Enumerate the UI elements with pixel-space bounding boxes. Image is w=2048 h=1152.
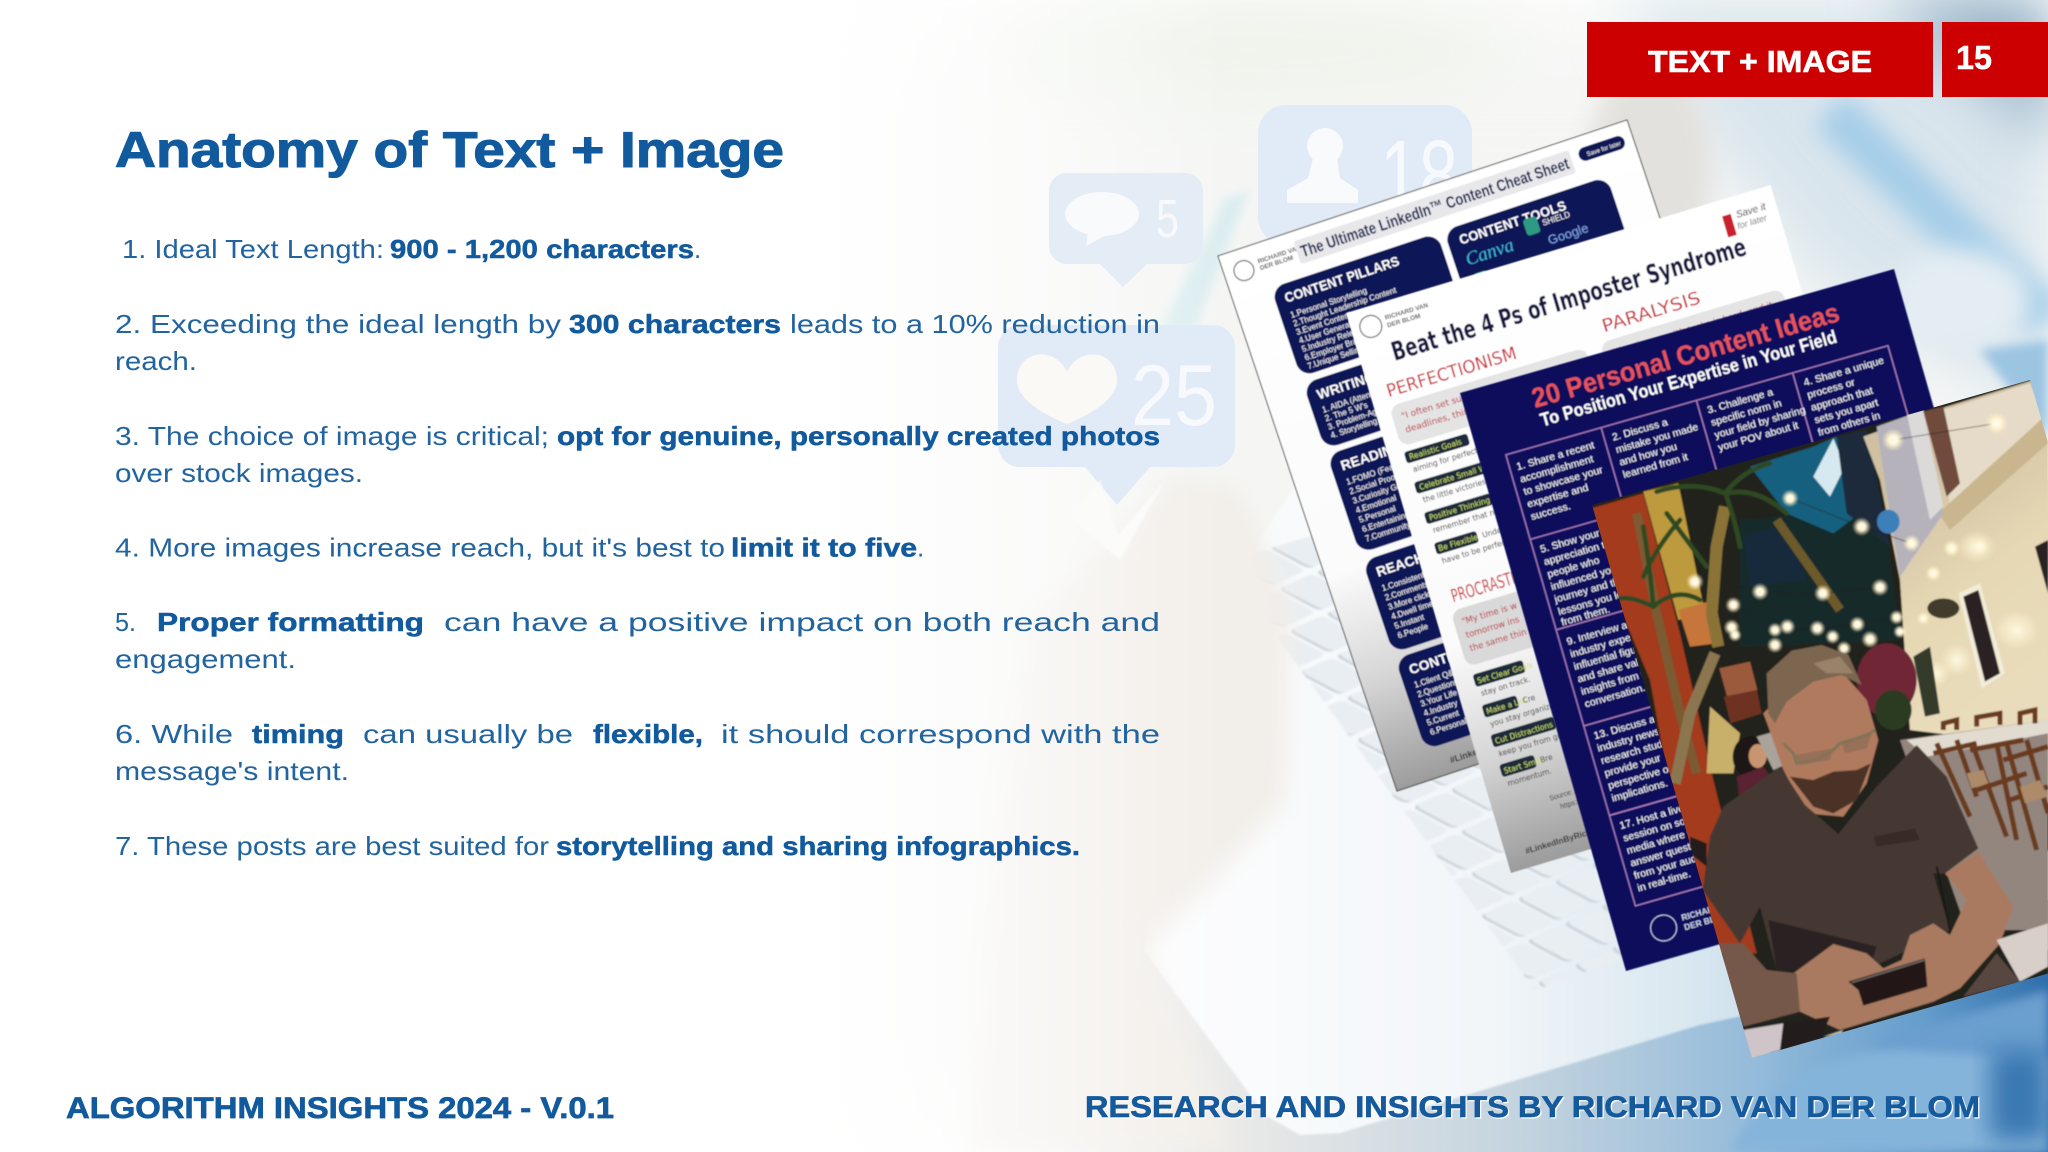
panel: content ideas: 6.Personal: [1429, 717, 1468, 737]
keyboard keys: [1230, 480, 1700, 990]
idea cells: people who: [1546, 554, 1601, 581]
tip chips: perfectionism: have to be perfect: [1441, 537, 1510, 566]
panel: content pillars: 7.Unique Selling: [1306, 344, 1365, 371]
tip chips: procrastination: you stay organized: [1489, 699, 1560, 729]
table and trousers: [1743, 1023, 1783, 1058]
panel: reach: 4.Dwell time: [1390, 599, 1435, 622]
woman in background: [1732, 732, 1783, 796]
tip chips: procrastination: Start Small: [1503, 755, 1545, 776]
list item 2: [115, 309, 1160, 376]
sheet: Beat the 4 Ps of Imposter Syndrome: the same thin: [1469, 628, 1528, 654]
title: Anatomy of Text + Image: [115, 122, 784, 178]
sheet: Beat the 4 Ps of Imposter Syndrome: "I often set super high standards and: [1400, 364, 1563, 422]
icon: heart bubble with count 25: 25: [1131, 348, 1217, 444]
list item 3: over stock images.: [115, 458, 363, 488]
panel: content pillars: CONTENT PILLARS: [1282, 253, 1401, 306]
tip chips: procrastination: momentum.: [1506, 766, 1553, 788]
panel: content tools: Canva: [1463, 235, 1517, 270]
panel: reading: 4.Emotional: [1355, 493, 1398, 515]
panel: content ideas: 2.Questions: [1416, 677, 1460, 699]
sheet: Beat the 4 Ps of Imposter Syndrome: Beat the 4 Ps of Imposter Syndrome: [1388, 232, 1750, 368]
sheet: Beat the 4 Ps of Imposter Syndrome: "Keeping up with tasks is hard, and it: [1611, 300, 1775, 359]
list item 2: 300 characters: [569, 309, 781, 339]
sheet: Beat the 4 Ps of Imposter Syndrome: Source: Jo: [1549, 786, 1583, 803]
footer left: ALGORITHM INSIGHTS 2024 - V.0.1: [66, 1092, 614, 1125]
sheet: Ultimate LinkedIn Content Cheat Sheet: #LinkedInByRichard: [1449, 729, 1534, 765]
logo: Richard van der Blom: RICHARD VAN: [1680, 897, 1739, 922]
floor, tables and chairs: [1900, 710, 2048, 930]
panel: reach: 3.More clicks: [1387, 589, 1434, 612]
panel: content tools: Google: [1546, 220, 1590, 248]
sheet: Beat the 4 Ps of Imposter Syndrome: deadlines, thinking: [1404, 401, 1489, 436]
panel: content pillars: [1271, 233, 1467, 377]
idea cells: from your audience: [1632, 846, 1722, 882]
list item 2: reach.: [115, 346, 197, 376]
panel: reading: READING: [1338, 438, 1405, 474]
idea grid lines: [1506, 346, 2017, 906]
tip chips: perfectionism: aiming for perfect: [1412, 446, 1479, 474]
idea cells: 2. Discuss a: [1611, 416, 1669, 444]
tip chips: procrastination: [1472, 653, 1577, 789]
idea cells: from others in: [1817, 410, 1882, 439]
idea cells: and how you: [1618, 441, 1679, 469]
idea cells: media where you: [1625, 823, 1706, 857]
panel: reading: 5.Personal: [1358, 504, 1397, 525]
blurred hand: [970, 470, 1290, 1152]
panel: writing: [1303, 329, 1491, 449]
list item 6: [115, 719, 1160, 786]
list item 6: flexible,: [593, 719, 703, 749]
idea cells: lessons you learned: [1557, 581, 1650, 618]
list item 3: 3. The choice of image is critical;: [115, 421, 549, 451]
sheet: Ultimate LinkedIn Content Cheat Sheet: [1218, 120, 1806, 791]
idea cells: success.: [1529, 500, 1572, 523]
list item 6: it should correspond with the: [721, 719, 1160, 749]
list item 4: .: [917, 532, 924, 562]
list item 5: 5.: [115, 607, 136, 637]
tip chips: procrastination: Make a List: [1485, 695, 1528, 716]
idea cells: 17. Host a live Q&A: [1618, 795, 1710, 832]
panel: content ideas: 3.Your Life: [1419, 688, 1459, 709]
idea cells: influential figure: [1573, 641, 1647, 673]
list item 6: can usually be: [363, 719, 573, 749]
idea cells: answer questions: [1629, 835, 1711, 869]
idea cells: sets you apart: [1813, 397, 1880, 426]
sheet: Ultimate LinkedIn Content Cheat Sheet: RICHARD VAN: [1257, 245, 1302, 266]
idea cells: and share valuable: [1576, 650, 1665, 686]
tip chips: procrastination: Cre: [1522, 693, 1537, 705]
idea cells: mistake you made: [1614, 421, 1700, 456]
panel: content pillars: 5.Industry Relevant: [1301, 324, 1370, 354]
idea cells: research study,: [1600, 736, 1671, 767]
panel: content tools: [1444, 176, 1637, 320]
panel: content ideas: [1395, 604, 1592, 750]
list item 7: storytelling and sharing infographics.: [556, 831, 1080, 861]
list item 4: [115, 532, 924, 562]
idea cells: specific norm in: [1710, 397, 1783, 429]
tip chips: procrastination: stay on track.: [1480, 674, 1532, 698]
idea cells: expertise and: [1526, 482, 1590, 511]
photo: man using phone in a lit courtyard restaurant: [1580, 373, 2048, 1058]
panel: reading: 3.Curiosity Gap: [1351, 480, 1407, 506]
sheet: Beat the 4 Ps of Imposter Syndrome: https://: [1559, 798, 1582, 811]
panel: writing: 1. AIDA (Attention): [1321, 385, 1387, 415]
sheet: 20 Personal Content Ideas: [1460, 269, 2048, 971]
sheet: Beat the 4 Ps of Imposter Syndrome: [1346, 185, 1936, 873]
idea cells: in real-time.: [1636, 868, 1692, 894]
icon: chat bubble with count 5: 5: [1156, 189, 1179, 249]
sheet: Ultimate LinkedIn Content Cheat Sheet: The Ultimate LinkedIn™ Content Cheat Sheet: [1298, 154, 1572, 261]
idea cells: your field by sharing: [1713, 404, 1807, 441]
wall and trees at left: [1643, 483, 1705, 620]
panel: content pillars: 6.Employer Branding: [1304, 330, 1377, 363]
panel: content pillars: 4.User Generated: [1298, 317, 1361, 346]
sheet: Beat the 4 Ps of Imposter Syndrome: DER BLOM: [1386, 313, 1422, 329]
icon: heart bubble with count 25: [998, 325, 1235, 505]
sheet: Beat the 4 Ps of Imposter Syndrome: for later: [1736, 212, 1769, 231]
idea cells: implications.: [1610, 777, 1669, 805]
idea cells: 1. Share a recent: [1515, 439, 1596, 473]
idea cells: 5. Show your: [1539, 527, 1602, 556]
panel: content pillars: 3.Event Content: [1295, 310, 1353, 337]
panel: reading: 2.Social Proof: [1348, 472, 1399, 496]
panel: content tools: SHIELD: [1541, 210, 1572, 228]
tip chips: perfectionism: Positive Thinking: [1428, 495, 1491, 522]
list item 7: 7. These posts are best suited for: [115, 831, 549, 861]
panel: content ideas: 5.Current: [1426, 709, 1461, 728]
sheet: Ultimate LinkedIn Content Cheat Sheet: Save for later: [1586, 141, 1622, 158]
icon: person bubble with count 18: 18: [1380, 120, 1458, 232]
list item 5: can have a positive impact on both reach and: [444, 607, 1160, 637]
tip chips: procrastination: Set Clear Goals: [1476, 660, 1534, 685]
idea cells: influenced your: [1550, 562, 1622, 593]
page number: [1942, 22, 2048, 97]
tip chips: perfectionism: Be Flexible: [1437, 533, 1479, 553]
panel: reach: 6.People: [1397, 622, 1430, 641]
sheet: 20 Personal Content Ideas: 20 Personal Content Ideas: [1528, 297, 1843, 414]
idea cells: appreciation to: [1542, 538, 1612, 568]
list item 2: 2. Exceeding the ideal length by: [115, 309, 561, 339]
list item 3: opt for genuine, personally created photos: [557, 421, 1160, 451]
panel: reach: REACH: [1374, 549, 1426, 580]
sheet: Beat the 4 Ps of Imposter Syndrome: Save it: [1735, 201, 1768, 221]
icon: chat bubble with count 5: [1049, 173, 1203, 287]
tip chips: perfectionism: Celebrate Small Wins: [1418, 460, 1497, 492]
sheet: Beat the 4 Ps of Imposter Syndrome: PARALYSIS: [1599, 288, 1703, 337]
list item 1: 1. Ideal Text Length:: [122, 234, 384, 264]
idea cells: learned from it: [1622, 451, 1689, 481]
panel: writing: 3. Problem-Agitate: [1327, 402, 1393, 432]
list item 3: [115, 421, 1160, 488]
sheet: Ultimate LinkedIn Content Cheat Sheet: DER BLOM: [1259, 255, 1294, 272]
sheet: 20 Personal Content Ideas: To Position Your Expertise in Your Field: [1538, 327, 1839, 430]
panel: content tools: ChatGPT: [1491, 261, 1526, 280]
list item 7: [115, 831, 1080, 861]
idea cells: [1514, 355, 2007, 895]
windows: [1958, 583, 2005, 688]
page number: 15: [1956, 39, 1992, 76]
flowers: [1857, 643, 1917, 717]
tip chips: procrastination: Cut Distractions: [1494, 720, 1554, 746]
list item 1: .: [694, 234, 701, 264]
fan decoration: [1927, 598, 1959, 618]
list item 1: [122, 234, 701, 264]
list item 6: 6. While: [115, 719, 233, 749]
idea cells: 4. Share a unique: [1802, 355, 1885, 389]
panel: writing: WRITING: [1315, 368, 1377, 402]
idea cells: accomplishment: [1519, 453, 1595, 486]
panel: reading: [1327, 400, 1526, 554]
footer right: RESEARCH AND INSIGHTS BY RICHARD VAN DER BLOM: [1085, 1091, 1980, 1124]
tip chips: procrastination: Bre: [1539, 752, 1554, 765]
idea cells: 3. Challenge a: [1706, 386, 1775, 416]
idea cells: 13. Discuss a recent: [1592, 705, 1687, 742]
list item 1: 900 - 1,200 characters: [390, 234, 694, 264]
panel: content pillars: 2.Thought Leadership Content: [1292, 286, 1398, 328]
tag: TEXT + IMAGE: TEXT + IMAGE: [1648, 44, 1872, 79]
building wall: [1863, 380, 2048, 747]
sheet: Beat the 4 Ps of Imposter Syndrome: PERFECTIONISM: [1384, 343, 1519, 402]
idea cells: process or: [1806, 376, 1857, 401]
sheet: Beat the 4 Ps of Imposter Syndrome: RICHARD VAN: [1384, 302, 1429, 322]
man: phone: [1848, 958, 1927, 1006]
list item 5: engagement.: [115, 644, 296, 674]
list item 6: timing: [252, 719, 344, 749]
idea cells: perspective on: [1607, 762, 1676, 792]
panel: reading: 7.Community: [1364, 520, 1412, 544]
idea cells: provide your: [1603, 752, 1663, 780]
panel: content ideas: 1.Client Q&A: [1413, 667, 1460, 690]
list item 5: [115, 607, 1160, 674]
panel: content ideas: 4.Industry: [1423, 699, 1459, 718]
idea cells: to showcase your: [1522, 464, 1605, 498]
tip chips: perfectionism: Under: [1481, 524, 1506, 540]
man: arms and hands: [1793, 852, 2013, 1030]
idea cells: approach that: [1809, 385, 1875, 414]
idea cells: insights from the: [1580, 665, 1657, 698]
tip chips: perfectionism: remember that not: [1432, 506, 1503, 535]
string lights: [1686, 412, 2008, 656]
logo: Richard van der Blom: [1648, 894, 1743, 944]
sheet: Beat the 4 Ps of Imposter Syndrome: tomorrow ins: [1465, 615, 1521, 641]
laptop body: [1145, 480, 2048, 1135]
idea cells: your field.: [1820, 427, 1867, 451]
panel: reading: 1.FOMO (Fear): [1345, 461, 1400, 487]
sheet: Beat the 4 Ps of Imposter Syndrome: #LinkedInByRichard: [1524, 822, 1605, 856]
list item 4: limit it to five: [731, 532, 917, 562]
panel: reach: 2.Comments: [1384, 580, 1430, 603]
idea cells: journey and the: [1552, 574, 1626, 606]
panel: reading: 6.Entertaining: [1361, 510, 1411, 534]
idea cells: 9. Interview an: [1565, 618, 1634, 648]
tip chips: procrastination: keep you from go: [1498, 731, 1563, 758]
sheet: Beat the 4 Ps of Imposter Syndrome: "My time is w: [1461, 601, 1518, 627]
idea cells: conversation.: [1583, 682, 1647, 711]
idea cells: industry news or: [1596, 722, 1673, 755]
panel: writing: 4. Storytelling: [1330, 417, 1378, 440]
panel: reach: 1.Consistent: [1381, 570, 1426, 593]
idea cells: industry expert,: [1569, 629, 1641, 661]
phone screen glimpse: [1160, 190, 1250, 330]
logo: Richard van der Blom: DER BLOM: [1683, 910, 1729, 932]
idea cells: from them.: [1560, 604, 1611, 629]
list item 5: Proper formatting: [157, 607, 424, 637]
list item 2: leads to a 10% reduction in: [790, 309, 1160, 339]
panel: content tools: CONTENT TOOLS: [1457, 197, 1568, 248]
list item 4: 4. More images increase reach, but it's best to: [115, 532, 725, 562]
icon: person bubble with count 18: [1258, 105, 1472, 245]
panel: writing: 2. The 5 W's: [1324, 401, 1369, 423]
blue desk shapes: [1730, 990, 2048, 1152]
man: t-shirt: [1703, 745, 1978, 970]
panel: reach: 5.Instant: [1393, 613, 1426, 631]
tip chips: perfectionism: Realistic Goals: [1408, 437, 1463, 462]
panel: reach: [1362, 506, 1559, 653]
tip chips: perfectionism: [1404, 428, 1519, 567]
idea cells: session on social: [1622, 811, 1702, 844]
panel: content ideas: CONTENT: [1407, 641, 1476, 678]
panel: content pillars: 1.Personal Storytelling: [1289, 286, 1368, 320]
tip chips: perfectionism: the little victories: [1422, 477, 1487, 504]
sheet: Beat the 4 Ps of Imposter Syndrome: PROCRASTINATION: [1449, 555, 1560, 607]
man: hair and face: [1763, 645, 1878, 817]
idea cells: your POV about it: [1717, 420, 1800, 454]
list item 6: message's intent.: [115, 756, 349, 786]
tag: TEXT + IMAGE: [1587, 22, 1933, 97]
